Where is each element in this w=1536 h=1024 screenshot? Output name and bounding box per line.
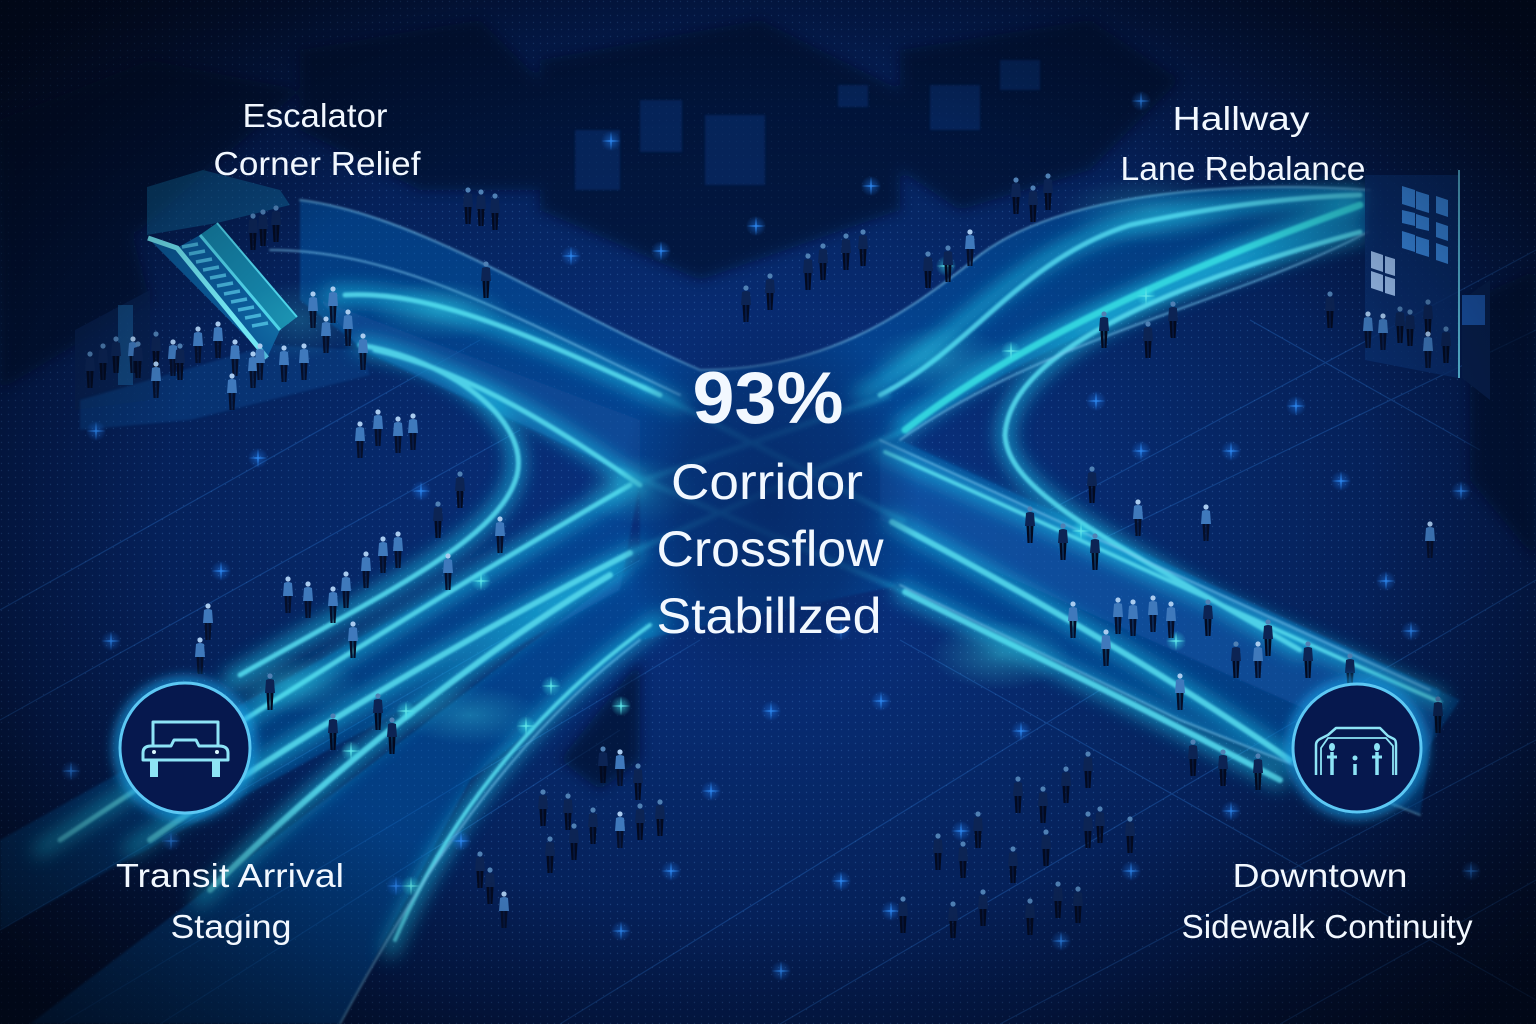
- escalator: [75, 170, 297, 410]
- centre halo: [618, 300, 918, 710]
- title: Corridor Crossflow Stabillzed: Corridor: [671, 454, 863, 510]
- stat: 93%: 93%: [692, 358, 844, 439]
- road surfaces: [0, 187, 1460, 1024]
- icon: vehicle badge: [119, 682, 251, 814]
- label: Downtown Sidewalk Continuity: [1182, 857, 1473, 945]
- label: Transit Arrival Staging: [116, 857, 344, 945]
- label: Downtown Sidewalk Continuity: Sidewalk Continuity: [1182, 908, 1473, 945]
- label: Downtown Sidewalk Continuity: Downtown: [1232, 857, 1408, 894]
- plaza around escalator: [80, 345, 370, 430]
- title: Corridor Crossflow Stabillzed: [656, 454, 884, 644]
- label: Hallway Lane Rebalance: Hallway: [1172, 100, 1310, 137]
- dark city blocks at top: [0, 20, 1536, 790]
- light streams: [60, 187, 1440, 1024]
- title: Corridor Crossflow Stabillzed: Crossflow: [656, 521, 884, 577]
- glow spots: [220, 175, 1240, 745]
- label: Escalator Corner Relief: [214, 97, 421, 182]
- label: Transit Arrival Staging: Staging: [170, 908, 292, 945]
- label: Hallway Lane Rebalance: Lane Rebalance: [1120, 150, 1366, 187]
- pedestrians: top-right building: [1099, 291, 1451, 368]
- pedestrians: lower right: [898, 751, 1135, 938]
- pedestrians: escalator plaza: [85, 205, 368, 410]
- label: Escalator Corner Relief: Escalator: [242, 97, 388, 134]
- pedestrians: lower centre: [475, 746, 665, 928]
- pedestrians: left centre: [195, 409, 505, 754]
- top-right building: [1365, 170, 1490, 400]
- pedestrians: top centre groups: [463, 173, 1053, 322]
- pedestrians: right corridor: [1025, 466, 1443, 790]
- icon: gate and pedestrians badge: [1292, 683, 1422, 813]
- crossing streams behind centre: [620, 385, 905, 592]
- light stream glow: [40, 195, 1440, 950]
- title: Corridor Crossflow Stabillzed: Stabillzed: [656, 588, 882, 644]
- label: Hallway Lane Rebalance: [1120, 100, 1366, 187]
- label: Transit Arrival Staging: Transit Arrival: [116, 857, 344, 894]
- label: Escalator Corner Relief: Corner Relief: [214, 145, 421, 182]
